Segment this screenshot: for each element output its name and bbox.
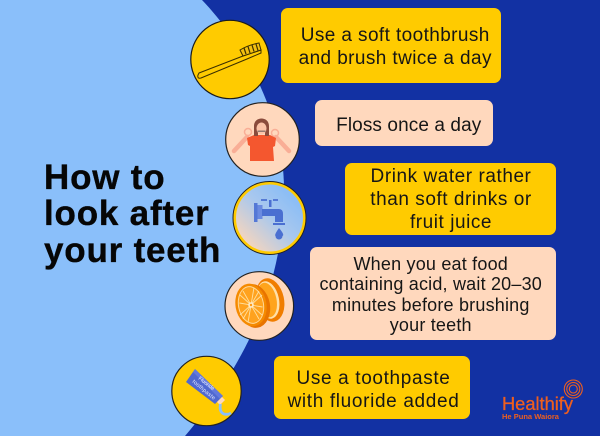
title — [44, 158, 221, 270]
tip: drink water: fruit juice — [410, 212, 492, 233]
icon: fluoride toothpaste tube: toothpaste — [191, 379, 216, 402]
icon: toothbrush — [191, 20, 269, 99]
logo: Healthify: Healthify — [502, 394, 573, 414]
tip: acid food: your teeth — [390, 315, 472, 335]
title: look after — [44, 194, 210, 233]
tip: acid food: containing acid, wait 20–30 — [319, 274, 542, 294]
tip: floss — [314, 100, 493, 146]
light blue curved panel — [0, 0, 284, 436]
icon: person flossing — [226, 103, 299, 176]
tip: fluoride toothpaste — [274, 356, 470, 419]
tip: soft toothbrush: and brush twice a day — [299, 48, 492, 68]
icon: fluoride toothpaste tube — [172, 356, 241, 426]
tip: drink water — [345, 162, 556, 234]
tip: drink water: than soft drinks or — [370, 189, 532, 210]
tip: soft toothbrush: Use a soft toothbrush — [301, 24, 490, 46]
tip: drink water: Drink water rather — [371, 166, 531, 187]
title: How to — [44, 158, 165, 196]
logo: Healthify — [502, 380, 582, 421]
tip: fluoride toothpaste: with fluoride added — [288, 390, 459, 412]
tip: floss: Floss once a day — [336, 114, 481, 136]
tip: acid food: When you eat food — [353, 254, 508, 274]
logo mark — [564, 380, 582, 398]
tip: acid food: minutes before brushing — [332, 295, 530, 315]
toothpaste label: Fluoride — [197, 376, 215, 392]
title: your teeth — [44, 230, 221, 270]
logo: Healthify: He Puna Waiora — [502, 412, 560, 421]
icon: orange slices — [225, 272, 294, 340]
tip: acid food — [310, 247, 556, 340]
tip: soft toothbrush — [281, 8, 500, 83]
icon: tap with water drop — [233, 182, 306, 254]
tip: fluoride toothpaste: Use a toothpaste — [296, 368, 451, 388]
